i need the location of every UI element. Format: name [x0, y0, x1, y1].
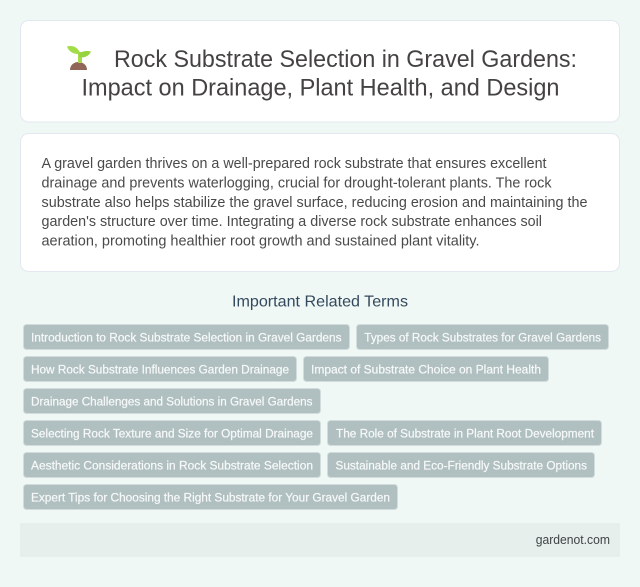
chip: plant health: Impact of Substrate Choice on Plant Health [311, 362, 541, 376]
chip: introduction [24, 324, 350, 350]
chip: drainage influence [24, 356, 296, 382]
chip: plant health [304, 356, 548, 382]
heading: important related terms: Important Related Terms [232, 294, 408, 310]
chip: drainage challenges: Drainage Challenges and Solutions in Gravel Gardens [31, 394, 312, 408]
title: Rock Substrate Selection in Gravel Gardens: [114, 46, 577, 73]
chip: expert tips [24, 484, 398, 510]
panel: header [20, 20, 620, 122]
chip: introduction: Introduction to Rock Substrate Selection in Gravel Gardens [31, 330, 342, 344]
text block: introduction paragraph [42, 156, 588, 250]
chip: aesthetics [24, 452, 320, 478]
chip: drainage influence: How Rock Substrate Influences Garden Drainage [31, 362, 289, 376]
chip: sustainable options [328, 452, 594, 478]
chip: texture and size [24, 420, 320, 446]
text block: introduction paragraph: aeration, promoting healthier root growth and sustained plant vitality. [42, 234, 480, 250]
text block: introduction paragraph: A gravel garden thrives on a well-prepared rock substrate that ensures excellent [42, 156, 546, 172]
related terms chips [24, 324, 608, 510]
chip: types [356, 324, 608, 350]
text block: introduction paragraph: drainage and prevents waterlogging, crucial for drought-tolerant plants. The rock [42, 176, 552, 192]
footer source text: gardenot.com [536, 532, 610, 547]
chip: root development [328, 420, 602, 446]
chip: sustainable options: Sustainable and Eco-Friendly Substrate Options [336, 458, 587, 472]
chip: root development: The Role of Substrate in Plant Root Development [336, 426, 595, 440]
chip: texture and size: Selecting Rock Texture and Size for Optimal Drainage [31, 426, 313, 440]
title [82, 46, 577, 102]
chip: drainage challenges [24, 388, 320, 414]
text block: introduction paragraph: substrate also helps stabilize the gravel surface, reducing erosion and maintaining the [42, 195, 588, 211]
title: Impact on Drainage, Plant Health, and Design [82, 74, 560, 102]
footer [20, 523, 620, 557]
chip: types: Types of Rock Substrates for Gravel Gardens [364, 330, 601, 344]
chip: aesthetics: Aesthetic Considerations in Rock Substrate Selection [31, 458, 313, 472]
panel: introduction [20, 134, 620, 272]
text block: introduction paragraph: garden's structure over time. Integrating a diverse rock substrate enhances soil [42, 214, 542, 230]
chip: expert tips: Expert Tips for Choosing the Right Substrate for Your Gravel Garden [31, 490, 390, 504]
icon: seedling [67, 46, 91, 70]
